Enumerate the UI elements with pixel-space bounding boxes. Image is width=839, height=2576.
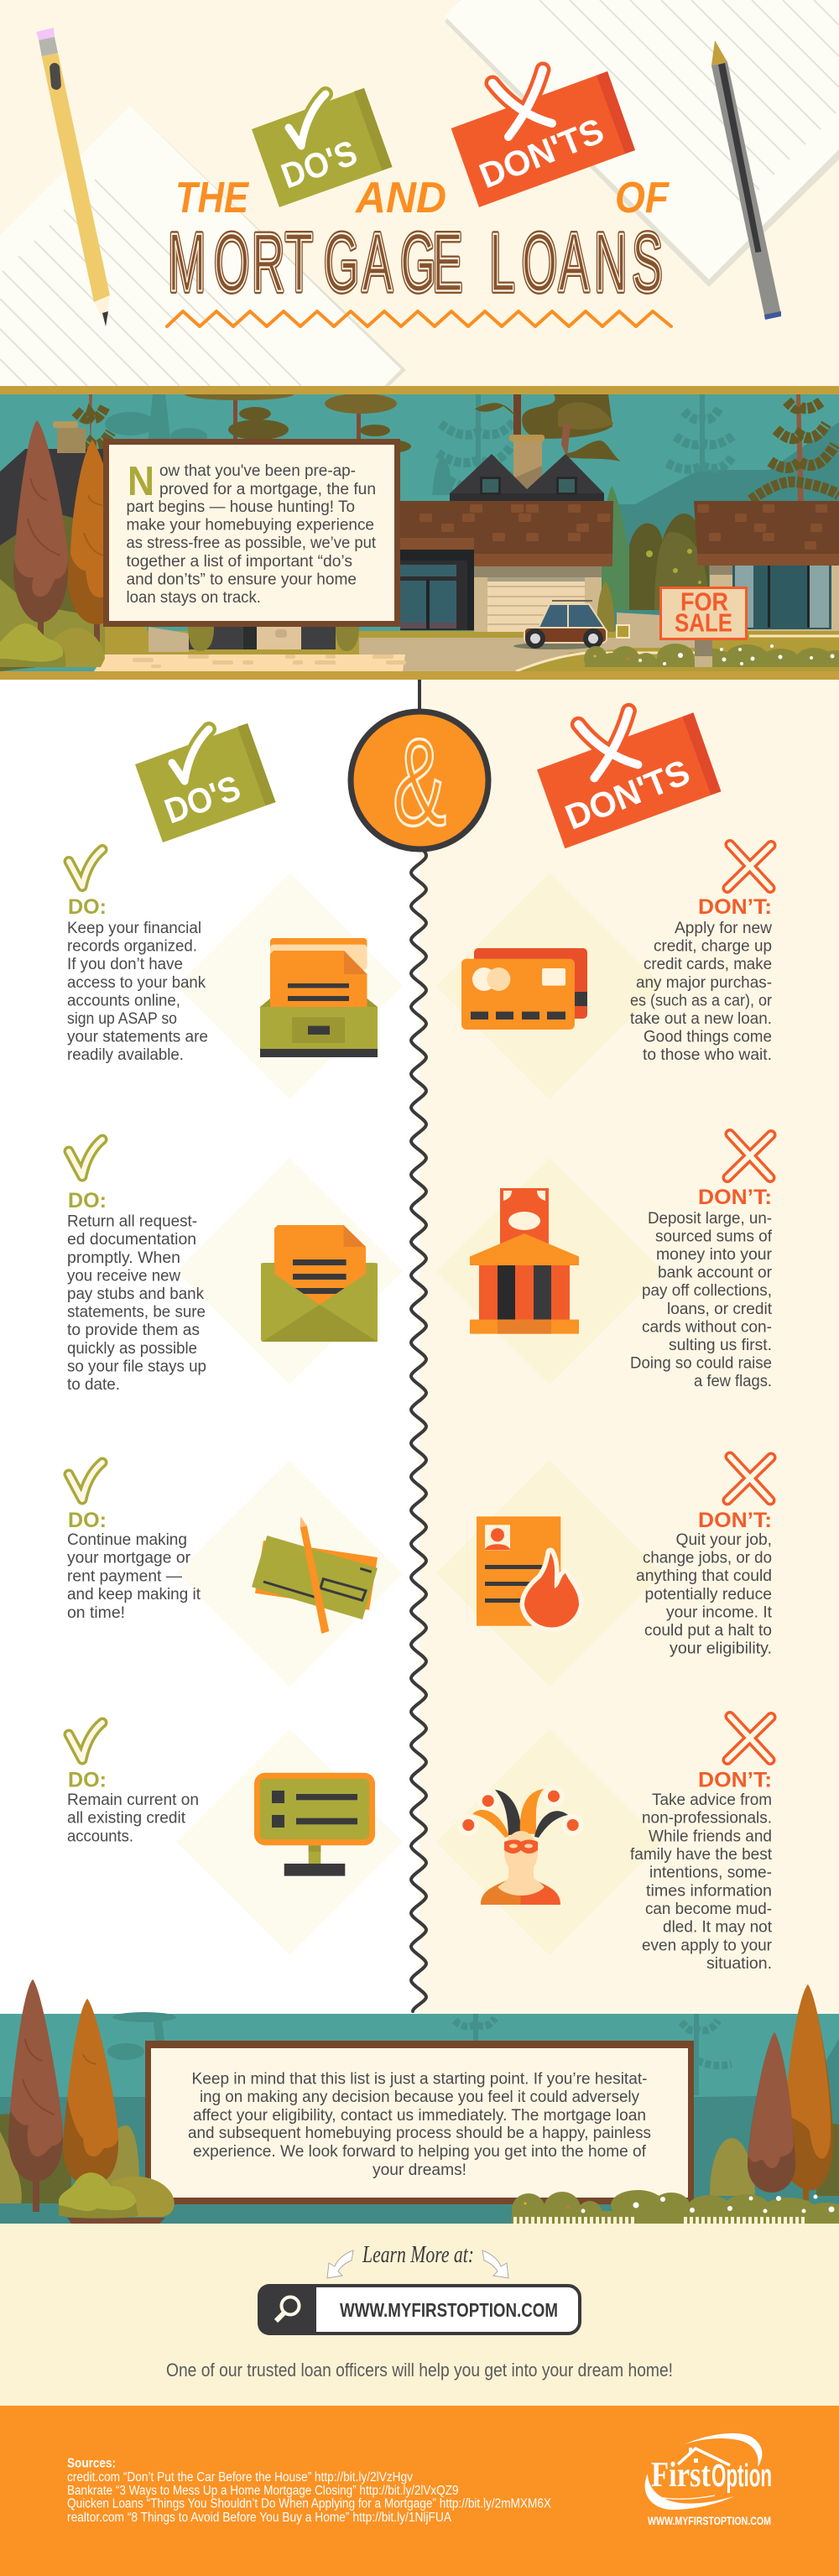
body text: Quit your job, bbox=[676, 1531, 772, 1549]
body text: credit, charge up bbox=[654, 938, 772, 956]
logo: Option bbox=[711, 2459, 772, 2494]
zigzag underline bbox=[167, 311, 671, 326]
intro text: loan stays on track. bbox=[126, 589, 261, 607]
icon: jester bbox=[457, 1786, 584, 1905]
body text bbox=[67, 1531, 201, 1622]
body text: loans, or credit bbox=[667, 1301, 773, 1318]
title: mortgage loans: MORTGAGE LOANS bbox=[168, 216, 662, 309]
heading: DO: bbox=[68, 895, 107, 919]
closing text: your dreams! bbox=[373, 2161, 466, 2179]
body text bbox=[67, 920, 208, 1064]
body text: a few flags. bbox=[694, 1373, 772, 1390]
icon: credit cards bbox=[461, 948, 587, 1030]
body text bbox=[636, 1531, 773, 1658]
search box: WWW.MYFIRSTOPTION.COM bbox=[340, 2299, 558, 2321]
body text: non-professionals. bbox=[642, 1810, 772, 1828]
body text bbox=[67, 1791, 199, 1845]
faint background trees bbox=[438, 394, 734, 495]
body text: rent payment — bbox=[67, 1567, 182, 1585]
heading: DON’T: bbox=[698, 1186, 772, 1209]
body text: cards without con- bbox=[642, 1318, 772, 1336]
sources: realtor.com “8 Things to Avoid Before You Buy a Home” http://bit.ly/1NljFUA bbox=[67, 2511, 452, 2525]
neighbour house bbox=[694, 501, 839, 631]
intro text: as stress-free as possible, we’ve put bbox=[126, 534, 377, 552]
left house behind trees bbox=[0, 449, 105, 565]
body text: readily available. bbox=[67, 1046, 184, 1064]
section tag: don'ts bbox=[537, 711, 721, 848]
x icon bbox=[727, 1717, 771, 1760]
body text: promptly. When bbox=[67, 1249, 180, 1267]
right hills bbox=[710, 2124, 839, 2196]
sources bbox=[67, 2457, 552, 2525]
heading: DON’T: bbox=[698, 1769, 772, 1792]
wavy center line bbox=[411, 850, 426, 2011]
body text: statements, be sure bbox=[67, 1304, 206, 1322]
body text: to provide them as bbox=[67, 1322, 200, 1339]
body text: family have the best bbox=[630, 1846, 773, 1864]
body text: you receive new bbox=[67, 1267, 180, 1285]
paper sheet right bbox=[445, 0, 839, 287]
closing text: Keep in mind that this list is just a starting point. If you’re hesitat- bbox=[191, 2071, 648, 2088]
intro box bbox=[103, 439, 400, 627]
tagline: One of our trusted loan officers will help you get into your dream home! bbox=[166, 2360, 673, 2380]
body text: If you don’t have bbox=[67, 956, 183, 973]
icon: monitor checklist bbox=[254, 1773, 375, 1876]
don't item 4 bbox=[457, 1717, 773, 1973]
intro text: make your homebuying experience bbox=[126, 517, 374, 534]
body text: dled. It may not bbox=[663, 1919, 773, 1937]
intro text bbox=[126, 462, 377, 607]
diamonds bbox=[176, 873, 663, 1955]
search box bbox=[258, 2284, 580, 2335]
learn more heading: Learn More at: bbox=[362, 2241, 474, 2268]
faint trees bbox=[107, 2012, 176, 2060]
center connector line bbox=[418, 680, 421, 710]
body text: on time! bbox=[67, 1604, 125, 1622]
body text: Doing so could raise bbox=[630, 1354, 772, 1372]
icon: envelope with letter bbox=[261, 1225, 378, 1342]
x icon bbox=[727, 844, 771, 888]
logo bbox=[645, 2433, 772, 2527]
intro text: and don’ts” to ensure your home bbox=[126, 571, 357, 589]
intro text: ow that you've been pre-ap- bbox=[159, 462, 356, 480]
logo: First bbox=[651, 2456, 711, 2495]
body text: Deposit large, un- bbox=[648, 1210, 772, 1228]
title words: THE bbox=[175, 174, 249, 222]
body text: records organized. bbox=[67, 938, 197, 956]
do item 2 bbox=[67, 1139, 378, 1394]
body text: any major purchas- bbox=[636, 974, 772, 992]
body text: your income. It bbox=[666, 1603, 773, 1621]
body text: and keep making it bbox=[67, 1586, 201, 1603]
distant hill bbox=[400, 422, 839, 671]
closing box bbox=[145, 2041, 694, 2204]
dark fir right bbox=[751, 394, 839, 503]
body text: to date. bbox=[67, 1376, 120, 1394]
body text: bank account or bbox=[658, 1265, 773, 1282]
section tag: don'ts: DON'TS bbox=[560, 752, 695, 837]
small olive tree bbox=[597, 581, 615, 632]
body text: your eligibility. bbox=[670, 1640, 772, 1658]
check icon bbox=[69, 1463, 102, 1499]
body text: could put a halt to bbox=[644, 1622, 772, 1640]
drop cap N: N bbox=[128, 459, 154, 504]
do item 1 bbox=[67, 849, 378, 1064]
closing bushes left bbox=[59, 2172, 175, 2224]
closing trees right bbox=[748, 1984, 833, 2200]
house dormers bbox=[450, 435, 604, 501]
body text: situation. bbox=[706, 1955, 772, 1973]
for sale sign bbox=[661, 587, 747, 671]
title: mortgage loans: MORTGAGE LOANS bbox=[168, 216, 662, 309]
body text: your statements are bbox=[67, 1029, 208, 1046]
paper sheet left bbox=[0, 106, 406, 386]
closing text bbox=[188, 2071, 651, 2179]
body text: even apply to your bbox=[642, 1937, 773, 1954]
body text: so your file stays up bbox=[67, 1358, 206, 1375]
body text: Take advice from bbox=[652, 1791, 772, 1809]
closing flower bushes bbox=[512, 2190, 839, 2225]
closing trees left bbox=[8, 1979, 118, 2212]
body text: money into your bbox=[656, 1246, 773, 1264]
body text: quickly as possible bbox=[67, 1340, 197, 1358]
gold band top bbox=[0, 386, 839, 394]
intro text: proved for a mortgage, the fun bbox=[159, 481, 376, 498]
learn more panel bbox=[0, 2224, 839, 2406]
body text: Keep your financial bbox=[67, 920, 201, 937]
closing scene bbox=[0, 2012, 839, 2224]
pencil bbox=[36, 28, 110, 326]
body text: Good things come bbox=[644, 1029, 772, 1046]
grass bbox=[585, 667, 839, 671]
sources: Sources: bbox=[67, 2457, 116, 2471]
icon: file drawer bbox=[260, 938, 378, 1057]
pine trees bbox=[185, 388, 621, 461]
car bbox=[513, 601, 607, 649]
heading: DON’T: bbox=[698, 1509, 772, 1532]
check icon bbox=[69, 849, 102, 886]
body text: Remain current on bbox=[67, 1791, 199, 1809]
don't item 3 bbox=[477, 1457, 773, 1658]
trees left bbox=[13, 420, 126, 642]
tag: do's bbox=[252, 88, 393, 207]
flower bushes bbox=[584, 644, 839, 671]
intro text: part begins — house hunting! To bbox=[126, 498, 355, 516]
front entry under box bbox=[105, 627, 359, 654]
don't item 2 bbox=[470, 1134, 773, 1390]
main house roof bbox=[400, 501, 613, 566]
neighborhood scene bbox=[0, 388, 839, 671]
don't item 1 bbox=[461, 844, 773, 1064]
for sale sign: SALE bbox=[675, 609, 732, 638]
bushes left bbox=[0, 623, 105, 667]
closing text: affect your eligibility, contact us immediately. The mortgage loan bbox=[193, 2107, 646, 2125]
title words: OF bbox=[615, 174, 670, 222]
closing text: experience. We look forward to helping you get into the home of bbox=[193, 2143, 647, 2161]
closing text: ing on making any decision because you feel it could adversely bbox=[200, 2088, 639, 2106]
for sale sign: FOR bbox=[680, 588, 728, 617]
title words bbox=[175, 174, 670, 222]
logo: WWW.MYFIRSTOPTION.COM bbox=[648, 2514, 771, 2527]
gold band bottom bbox=[0, 671, 839, 680]
dark fir left bbox=[57, 394, 113, 509]
body text: change jobs, or do bbox=[643, 1550, 772, 1567]
sources: Bankrate “3 Ways to Mess Up a Home Mortgage Closing” http://bit.ly/2lVxQZ9 bbox=[67, 2484, 458, 2498]
body text: take out a new loan. bbox=[630, 1010, 772, 1028]
body text: all existing credit bbox=[67, 1810, 186, 1828]
body text: sulting us first. bbox=[669, 1337, 772, 1354]
tag: don'ts bbox=[451, 70, 635, 207]
left hills bbox=[0, 2114, 139, 2203]
body text: potentially reduce bbox=[644, 1586, 772, 1603]
body text: Continue making bbox=[67, 1531, 187, 1549]
heading: DO: bbox=[68, 1509, 107, 1532]
ampersand badge bbox=[351, 712, 488, 852]
title words: AND bbox=[354, 174, 446, 222]
body text: sign up ASAP so bbox=[67, 1010, 177, 1028]
left lawn bbox=[0, 512, 147, 671]
body text: times information bbox=[646, 1882, 772, 1900]
right column background bbox=[420, 680, 839, 2014]
do item 3 bbox=[67, 1463, 378, 1634]
body text: Apply for new bbox=[675, 920, 772, 937]
body text: ed documentation bbox=[67, 1231, 196, 1249]
section tag: do's: DO'S bbox=[159, 768, 246, 831]
check icon bbox=[69, 1723, 102, 1760]
body text: accounts. bbox=[67, 1828, 133, 1845]
body text: access to your bank bbox=[67, 974, 206, 992]
sources: Quicken Loans “Things You Shouldn’t Do When Applying for a Mortgage” http://bit.ly/2mMXM6X bbox=[67, 2497, 552, 2511]
body text bbox=[630, 1210, 773, 1390]
body text: credit cards, make bbox=[644, 956, 772, 973]
x icon bbox=[727, 1457, 771, 1500]
footer bbox=[0, 2406, 839, 2576]
do item 4 bbox=[67, 1723, 375, 1876]
driveway and lawn bbox=[105, 613, 839, 671]
body text: pay stubs and bank bbox=[67, 1285, 204, 1303]
body text: to those who wait. bbox=[643, 1046, 772, 1064]
walkway bbox=[94, 654, 406, 671]
tag: don'ts: DON'TS bbox=[474, 111, 609, 196]
ampersand badge: & bbox=[393, 713, 446, 852]
icon: check and pencil bbox=[252, 1516, 378, 1634]
icon: bank with bill bbox=[470, 1188, 579, 1334]
body text bbox=[67, 1213, 206, 1394]
tag: do's: DO'S bbox=[276, 133, 362, 196]
header panel bbox=[0, 0, 839, 386]
body text bbox=[630, 920, 773, 1064]
body text: intentions, some- bbox=[649, 1864, 772, 1882]
body text: es (such as a car), or bbox=[630, 992, 773, 1009]
body text: pay off collections, bbox=[642, 1282, 772, 1300]
pen bbox=[711, 40, 781, 320]
arrow left bbox=[327, 2250, 353, 2278]
icon: resume on fire bbox=[477, 1516, 579, 1627]
garage bbox=[474, 566, 602, 632]
body text: sourced sums of bbox=[655, 1228, 773, 1246]
intro text: together a list of important “do’s bbox=[126, 553, 352, 571]
heading: DON’T: bbox=[698, 895, 772, 919]
body text: anything that could bbox=[636, 1567, 772, 1585]
section tag: do's bbox=[135, 723, 275, 842]
check icon bbox=[69, 1139, 102, 1176]
body text: While friends and bbox=[649, 1828, 772, 1845]
sources: credit.com “Don’t Put the Car Before the House” http://bit.ly/2lVzHgv bbox=[67, 2470, 413, 2485]
arrow right bbox=[482, 2250, 508, 2278]
entrance window bbox=[400, 550, 474, 630]
body text: accounts online, bbox=[67, 992, 180, 1009]
heading: DO: bbox=[68, 1189, 107, 1212]
body text: can become mud- bbox=[645, 1901, 772, 1918]
icon: magnifier bbox=[276, 2297, 299, 2321]
heading: DO: bbox=[68, 1769, 107, 1792]
body text: your mortgage or bbox=[67, 1550, 191, 1567]
x icon bbox=[727, 1134, 771, 1178]
closing text: and subsequent homebuying process should be a happy, painless bbox=[188, 2125, 651, 2142]
body text bbox=[630, 1791, 773, 1973]
body text: Return all request- bbox=[67, 1213, 197, 1231]
background bushes bbox=[600, 486, 709, 610]
